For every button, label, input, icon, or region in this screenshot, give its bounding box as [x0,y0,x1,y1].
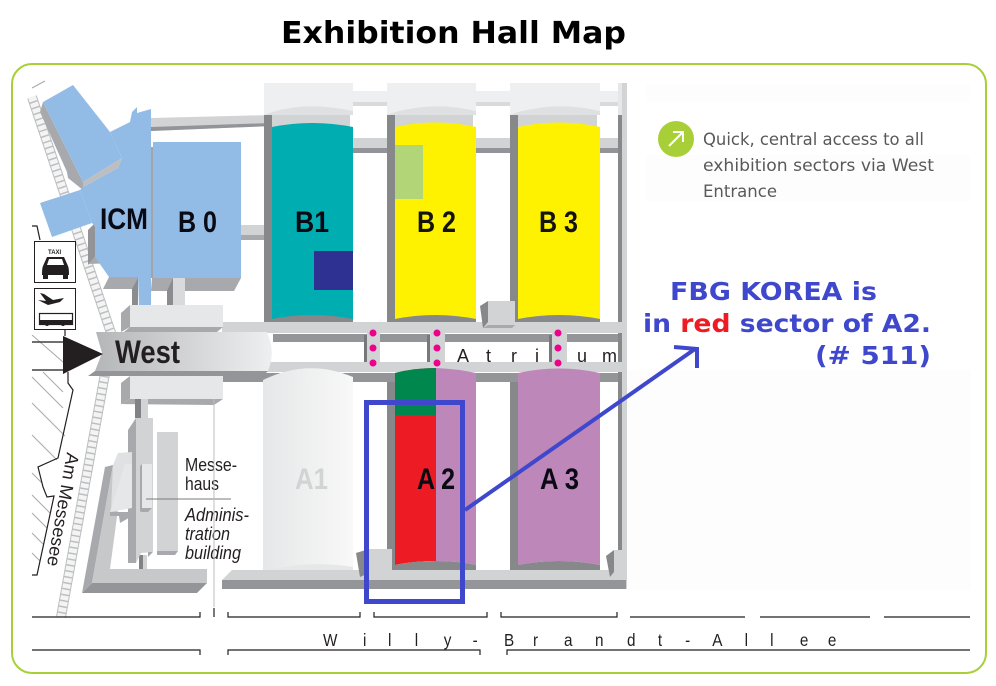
west entrance banner [88,332,272,376]
icon: green arrow badge [658,121,694,157]
building: ICM [40,85,151,305]
stair box A right [606,550,614,577]
hall A1 [263,368,353,570]
title: Exhibition Hall Map [281,16,626,51]
connectors to B0 and B1 [151,115,272,240]
pointer arrow [465,347,697,510]
callout: in red sector of A2. [643,309,931,338]
stair box A left [356,549,369,577]
top caps [264,83,600,115]
callout: (# 511) [815,341,931,370]
administration building: building [185,543,241,563]
hall B3 [518,122,600,319]
hall B1 [272,123,353,319]
label: A3: A 3 [540,463,579,496]
cross beams [353,138,618,148]
label: B 0: B 0 [178,206,217,239]
label: Atrium: Atrium [457,346,617,366]
boundary lines [32,226,73,575]
label: West: West [115,334,180,370]
atrium dots [370,330,562,366]
site surroundings [32,81,112,617]
entrance arrow [32,336,103,374]
hall bases [272,310,600,323]
access note: exhibition sectors via West [703,156,934,176]
B1 highlighted sector [314,251,353,290]
B2 green sector [395,145,423,199]
hall A2 [395,368,476,570]
administration building [82,399,249,593]
stair box B [480,301,488,328]
label: ICM: ICM [100,203,148,236]
railway strip [32,97,112,617]
label: B2: B 2 [417,206,456,239]
label: A1: A1 [295,463,328,496]
building: B0 [151,142,241,305]
icon: taxi: TAXI [48,250,62,256]
faded background [627,84,971,590]
label: Messehaus: Messe- [185,455,237,475]
street label: Willy-Brandt-Allee: Willy-Brandt-Allee [323,630,836,650]
street label: Am Messesee: Am Messesee [43,451,83,568]
highlight box around A2 [366,402,462,602]
hall A3 [518,368,600,570]
icon: plane and bus [34,288,76,330]
access note [703,130,934,202]
atrium walkways [367,330,567,366]
upper and lower corridor structure [222,83,627,589]
access note: Quick, central access to all [703,130,924,150]
columns [264,115,623,580]
callout [643,277,931,370]
label: A2: A 2 [417,463,455,496]
callout: FBG KOREA is [670,277,877,306]
A2 green sector [395,368,436,415]
entrance blocks [121,305,223,405]
atrium bands [222,322,626,333]
floor band [222,570,626,580]
label: Administration building: Adminis- [184,505,249,525]
road lines [32,399,970,655]
label: B1: B1 [295,206,329,239]
administration building: haus [185,474,219,494]
A2 purple part [436,368,476,565]
hatching [32,81,65,561]
administration building: tration [185,524,230,544]
connector beams [353,91,618,102]
icon: taxi [34,242,76,282]
hall B2 [395,122,476,319]
label: B3: B 3 [539,206,578,239]
access note: Entrance [703,182,777,202]
